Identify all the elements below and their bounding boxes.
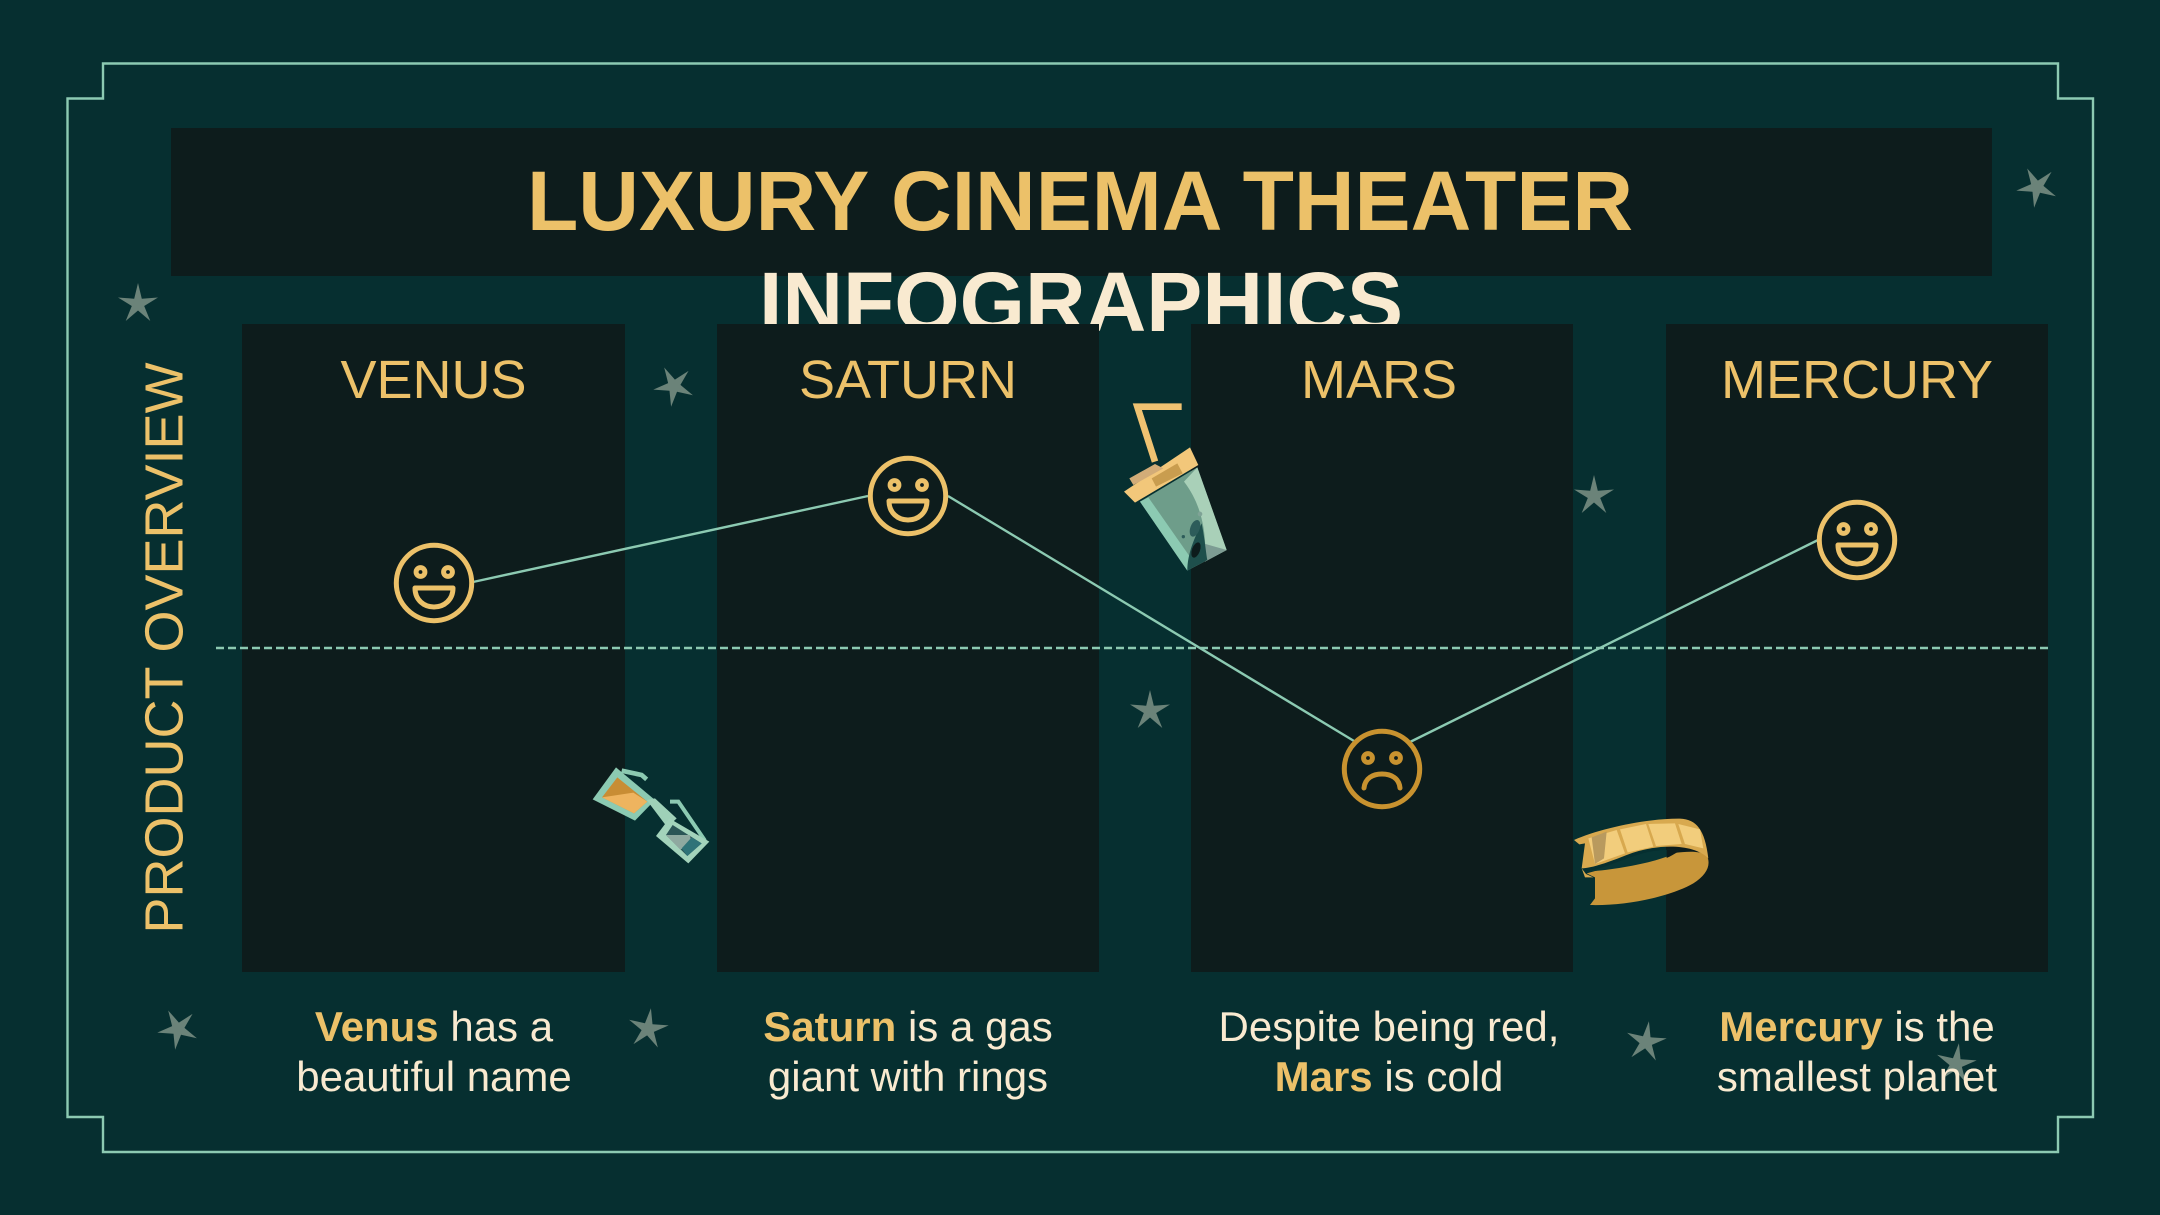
column headings: MARS (1301, 350, 1457, 410)
text block: Mars: Mars is cold (1275, 1053, 1503, 1100)
panel: Mars background (1191, 324, 1573, 972)
vertical heading: PRODUCT OVERVIEW (134, 362, 194, 934)
icon: drink cup (1124, 407, 1227, 571)
text block: Venus: beautiful name (296, 1053, 572, 1100)
icon: Saturn happy face (870, 458, 946, 534)
icon: Mars sad face (1344, 731, 1420, 807)
column headings: SATURN (799, 350, 1017, 410)
icon: film strip (1574, 819, 1709, 905)
icon: Venus happy face (396, 545, 472, 621)
text block: Mercury: Mercury is the (1719, 1003, 1995, 1050)
panel: Venus background (242, 324, 625, 972)
column headings: MERCURY (1721, 350, 1993, 410)
title bar (171, 128, 1992, 276)
title: LUXURY CINEMA THEATER (527, 154, 1633, 248)
text block: Mars: Despite being red, (1219, 1003, 1559, 1050)
panel: Saturn background (717, 324, 1099, 972)
column headings: VENUS (340, 350, 527, 410)
title (527, 154, 1633, 349)
line chart connectors (473, 496, 1818, 742)
stars (118, 167, 2059, 1084)
icon: Mercury happy face (1819, 502, 1895, 578)
title: INFOGRAPHICS (759, 255, 1403, 349)
text block: Mercury: smallest planet (1717, 1053, 1997, 1100)
text block: Saturn: giant with rings (768, 1053, 1048, 1100)
panel: Mercury background (1666, 324, 2048, 972)
text block: Saturn: Saturn is a gas (763, 1003, 1053, 1050)
column headings (340, 350, 1993, 410)
text block: Venus: Venus has a (315, 1003, 553, 1050)
midline (216, 647, 2048, 649)
icon: 3D glasses (593, 767, 709, 863)
